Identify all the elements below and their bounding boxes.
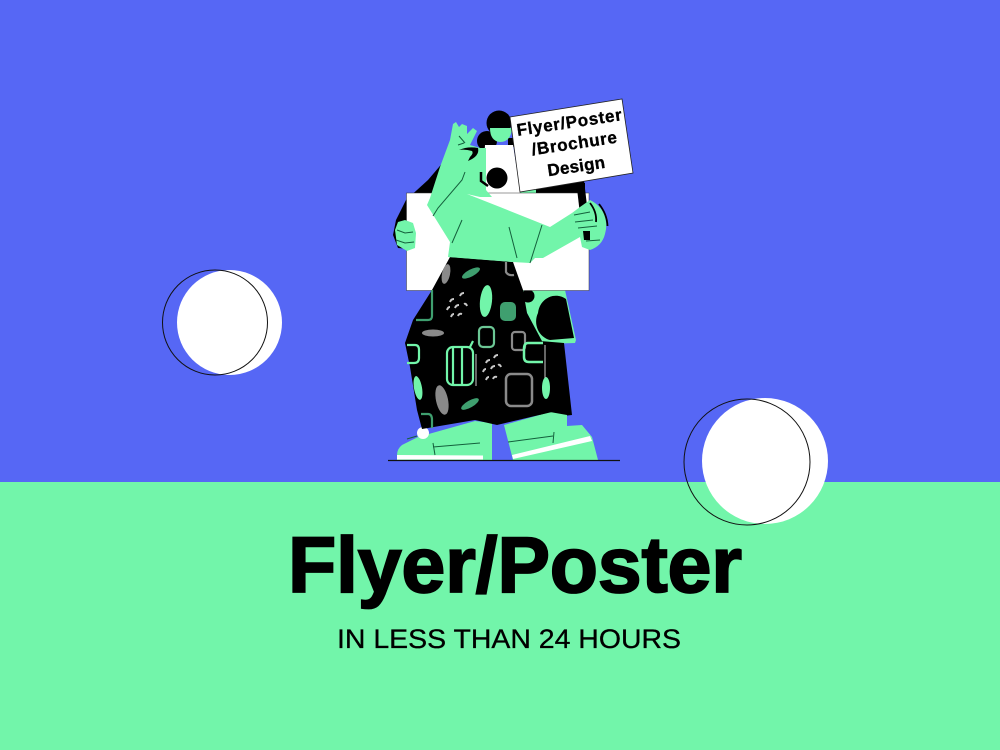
left hand on board	[395, 220, 416, 251]
hair behind figure	[393, 160, 470, 250]
decorative moon: right circle	[684, 398, 828, 525]
decorative moon: left circle	[162, 270, 282, 375]
white board held by figure	[406, 193, 589, 290]
panel: green ground	[0, 482, 1000, 750]
title: Flyer/Poster	[288, 520, 742, 609]
trouser pattern	[407, 262, 550, 428]
arm and shirt crease lines	[433, 136, 542, 263]
black band under sign	[525, 183, 585, 195]
raised arm and torso	[427, 122, 582, 263]
right hand gripping pole	[572, 200, 608, 250]
subtitle: IN LESS THAN 24 HOURS	[337, 624, 681, 654]
patterned black trousers	[405, 257, 552, 429]
ground line	[388, 460, 620, 462]
sign: Flyer/Poster /Brochure Design: Design	[546, 153, 606, 180]
head	[477, 110, 515, 151]
sign: Flyer/Poster /Brochure Design: Flyer/Poster	[515, 105, 623, 140]
sign: Flyer/Poster /Brochure Design	[510, 99, 633, 192]
green neck patch beside sign	[520, 186, 536, 195]
shoes and ankles	[397, 412, 598, 460]
rear black trouser panel	[540, 341, 572, 420]
sign: Flyer/Poster /Brochure Design: /Brochure	[530, 128, 618, 159]
black wrist mark under fingers	[459, 147, 478, 161]
small black ball at shoulder	[481, 168, 508, 188]
panel: blue background	[0, 0, 1000, 482]
rear right sleeve with dot	[520, 285, 576, 344]
sign pole	[576, 180, 591, 240]
white shoulder panel	[482, 145, 521, 195]
illustration: person holding signs	[388, 110, 620, 460]
